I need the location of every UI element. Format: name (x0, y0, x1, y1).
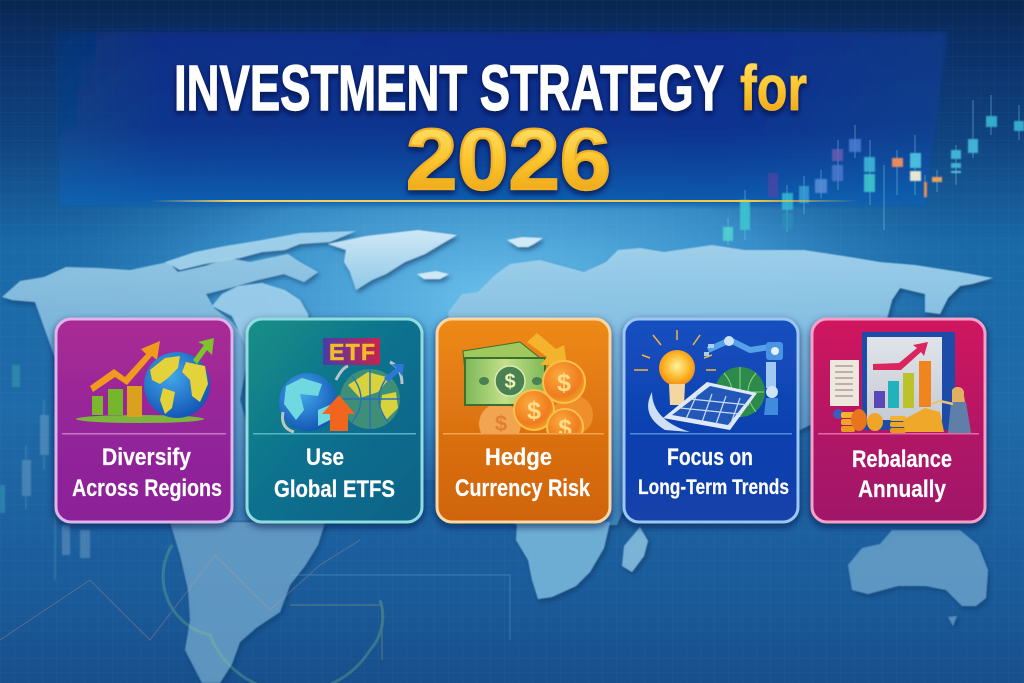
header band (55, 32, 948, 205)
title year: 2026: 2026 (406, 112, 611, 208)
icon: cash and coins: $ (558, 415, 572, 442)
map: europe, africa and asia (448, 245, 993, 525)
label: Hedge (485, 444, 552, 471)
label (455, 444, 591, 502)
panel: hedge currency risk (437, 319, 610, 522)
title (174, 52, 807, 208)
map: svalbard (507, 237, 543, 247)
icon: etf globes (279, 338, 404, 432)
panel: diversify across regions (56, 319, 232, 522)
label: Rebalance (852, 446, 952, 473)
map: madagascar (622, 527, 648, 572)
decorative chart overlay: lower left (0, 540, 510, 683)
map: australia (848, 530, 988, 606)
label: Across Regions (72, 475, 222, 502)
candlestick chart: left side (0, 365, 90, 580)
map: iceland (417, 271, 449, 279)
icon: bulb, solar panel and robot arm (634, 330, 783, 432)
map: tasmania (948, 616, 957, 626)
candlestick chart: upper right (723, 95, 1024, 245)
label: Use (306, 444, 344, 471)
label: Diversify (102, 444, 192, 471)
panel: focus on long-term trends (624, 319, 798, 522)
label (852, 446, 952, 503)
label: Global ETFS (274, 476, 395, 503)
label: Long-Term Trends (638, 476, 789, 499)
label: Annually (858, 476, 947, 503)
icon: chart board, coins and figure (830, 332, 971, 433)
icon: cash and coins: $ (504, 371, 516, 393)
label: Focus on (667, 444, 753, 471)
label (72, 444, 222, 502)
panel: use global etfs (247, 319, 422, 522)
icon: etf globes: ETF (329, 339, 375, 365)
icon: cash and coins: $ (495, 411, 507, 436)
panel: rebalance annually (812, 319, 985, 522)
title line: Investment Strategy for: for (740, 52, 807, 124)
label (274, 444, 395, 503)
label (638, 444, 789, 499)
world map (2, 230, 993, 683)
icon: cash and coins: $ (527, 397, 541, 425)
map: north america (2, 231, 356, 522)
icon: cash and coins: $ (557, 369, 571, 397)
label: Currency Risk (455, 475, 591, 502)
map: africa (516, 522, 610, 599)
map: greenland (328, 230, 457, 290)
icon: cash and coins (462, 333, 593, 433)
title line: Investment Strategy for: INVESTMENT STRATEGY (174, 52, 724, 124)
icon: rising chart and globe (76, 338, 214, 423)
gold divider line (150, 200, 860, 202)
map: south america (170, 522, 325, 683)
